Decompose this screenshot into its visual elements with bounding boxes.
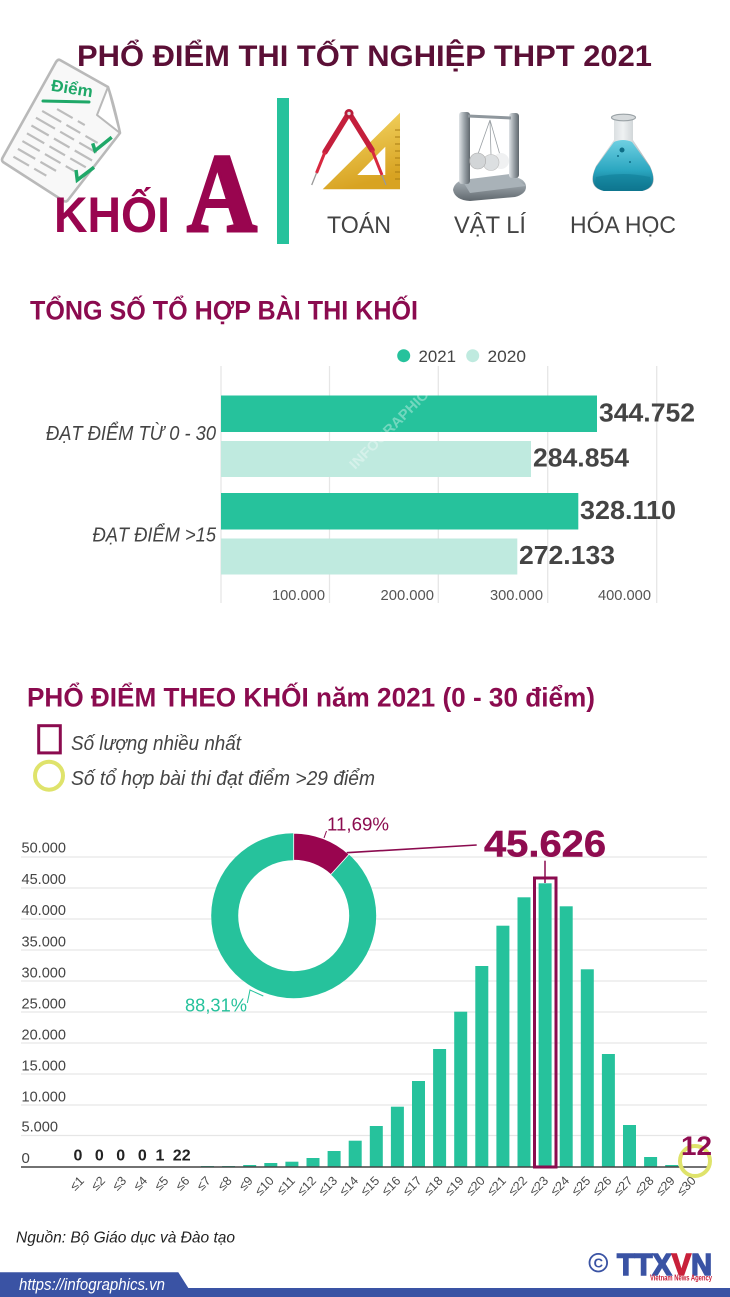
column chart: score distribution: 0 [95,1148,104,1165]
column chart: score distribution: 0 [138,1148,147,1165]
bar chart: total combinations: 328.110 [580,495,676,525]
column chart: score distribution: ≤26 [590,1174,614,1198]
column chart: score distribution: 20.000 [22,1026,66,1044]
subject labels [327,212,676,239]
column chart: score distribution: ≤30 [674,1174,699,1198]
logo: TTXVN: TTXVN [617,1247,712,1282]
legend: markers: Số tổ hợp bài thi đạt điểm >29 điểm [71,768,375,790]
column chart: score distribution: 45.000 [22,871,66,888]
legend: years: 2021 [418,347,456,366]
bar chart: total combinations: 300.000 [490,587,543,604]
legend: years: 2020 [488,347,526,366]
column chart: score distribution: ≤4 [131,1174,150,1193]
column chart: score distribution: ≤10 [252,1174,277,1198]
legend: years [397,347,526,366]
icon: newton cradle [453,112,526,201]
donut chart: 88,31% [185,996,247,1016]
column chart: score distribution: ≤28 [632,1174,657,1198]
column chart: score distribution: 0 [22,1150,30,1167]
icon: chemistry flask [592,114,654,191]
bar chart: total combinations: 400.000 [598,587,651,604]
column chart: score distribution: 30.000 [22,964,66,982]
column chart: score distribution: ≤20 [463,1174,488,1198]
icon: compass and set square [312,109,400,189]
icon: exam paper: Điểm [50,77,94,101]
heading: total: TỔNG SỐ TỔ HỢP BÀI THI KHỐI [30,294,418,326]
column chart: score distribution: ≤14 [337,1174,361,1198]
column chart: score distribution: ≤1 [67,1174,87,1193]
source: Nguồn: Bộ Giáo dục và Đào tạo [16,1230,235,1247]
column chart: score distribution: ≤16 [379,1174,403,1198]
callout: top score count [680,1131,712,1176]
heading: distribution: PHỔ ĐIỂM THEO KHỐI năm 2021 (0 - 30 điểm) [27,681,595,713]
column chart: score distribution: 35.000 [22,934,66,950]
bar chart: total combinations: ĐẠT ĐIỂM TỪ 0 - 30 [46,422,216,445]
legend: markers: Số lượng nhiều nhất [71,733,242,755]
donut chart [185,815,389,1016]
column chart: score distribution: ≤21 [484,1174,509,1198]
column chart: score distribution: 50.000 [22,840,66,857]
callout: top score count: 12 [681,1131,712,1161]
column chart: score distribution: ≤6 [173,1174,192,1193]
donut chart: 11,69% [327,815,389,835]
title: PHỔ ĐIỂM THI TỐT NGHIỆP THPT 2021 [77,39,652,73]
column chart: score distribution: ≤9 [236,1174,256,1193]
column chart: score distribution: 40.000 [22,902,66,919]
subject labels: HÓA HỌC [570,212,676,239]
bar chart: total combinations: INFOGRAPHICS [346,379,438,472]
column chart: score distribution: 5.000 [22,1118,58,1136]
column chart: score distribution: 10.000 [22,1088,66,1106]
bar chart: total combinations [46,366,695,604]
column chart: score distribution: ≤19 [442,1174,467,1198]
callout: highest value [347,824,606,1167]
bar chart: total combinations: 272.133 [519,540,615,570]
column chart: score distribution: ≤17 [400,1174,425,1198]
column chart: score distribution: ≤18 [421,1174,446,1198]
column chart: score distribution: ≤22 [505,1174,530,1198]
column chart: score distribution: ≤8 [215,1174,235,1193]
logo: TTXVN: C [594,1256,604,1270]
icon: exam paper [2,60,120,202]
callout: highest value: 45.626 [484,824,606,865]
column chart: score distribution: ≤12 [294,1174,319,1198]
column chart: score distribution: 0 [74,1148,83,1165]
divider bar [277,98,289,244]
column chart: score distribution: ≤2 [88,1174,108,1193]
subject labels: VẬT LÍ [454,212,526,239]
column chart: score distribution: 25.000 [22,996,66,1012]
column chart: score distribution: ≤27 [611,1174,636,1198]
heading: khoi A: KHỐI [54,186,170,243]
column chart: score distribution: ≤3 [109,1174,129,1193]
column chart: score distribution: 15.000 [22,1058,66,1074]
footer bar: https://infographics.vn [19,1275,165,1294]
column chart: score distribution: ≤15 [358,1174,382,1198]
column chart: score distribution: ≤11 [274,1174,298,1198]
heading: khoi A [54,132,257,256]
legend: markers [35,726,375,790]
bar chart: total combinations: 100.000 [272,587,325,604]
footer bar [0,1272,730,1297]
column chart: score distribution: ≤25 [569,1174,593,1198]
bar chart: total combinations: 200.000 [380,587,434,604]
heading: khoi A: A [187,132,257,256]
bar chart: total combinations: ĐẠT ĐIỂM >15 [92,524,217,546]
column chart: score distribution: 22 [173,1148,191,1165]
column chart: score distribution: ≤13 [316,1174,340,1198]
column chart: score distribution: ≤24 [548,1174,572,1198]
column chart: score distribution: 1 [156,1148,165,1165]
column chart: score distribution: 0 [116,1148,125,1165]
bar chart: total combinations: 284.854 [533,443,630,473]
bar chart: total combinations: 344.752 [599,398,695,428]
column chart: score distribution: ≤5 [152,1174,171,1193]
column chart: score distribution: ≤23 [527,1174,551,1198]
column chart: score distribution [21,840,707,1198]
column chart: score distribution: ≤29 [653,1174,678,1198]
subject labels: TOÁN [327,212,391,239]
column chart: score distribution: ≤7 [194,1174,214,1193]
